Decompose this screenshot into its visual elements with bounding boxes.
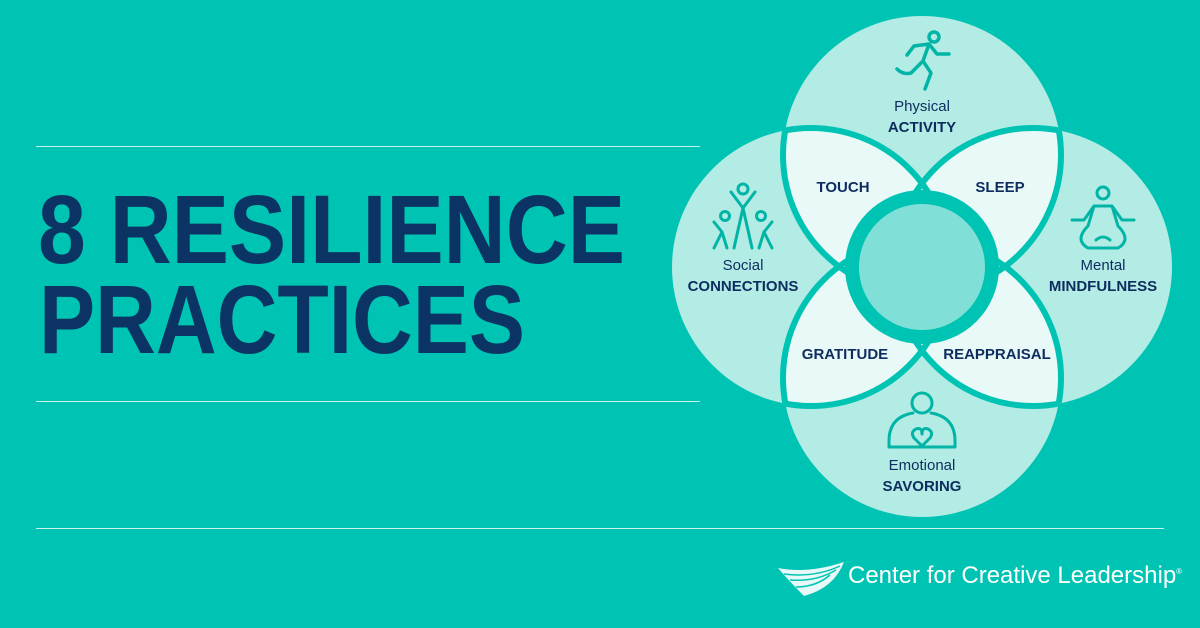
labels: Mental [1080,257,1126,274]
diagram: eight practices [672,16,1172,517]
labels: Social [723,257,763,274]
labels: CONNECTIONS [688,278,798,295]
icon: runner [897,32,949,89]
labels: SAVORING [883,478,961,495]
title [38,180,625,370]
labels: ACTIVITY [888,119,956,136]
icon: meditation [1072,187,1134,248]
logo [778,562,1182,596]
labels: Emotional [889,457,955,474]
labels: GRATITUDE [802,346,888,363]
labels: MINDFULNESS [1049,278,1157,295]
labels: Physical [894,98,950,115]
labels: REAPPRAISAL [943,346,1051,363]
labels [688,98,1157,495]
labels: SLEEP [975,179,1025,196]
icon: social [714,184,772,248]
icon: emotional [889,393,955,447]
center circle [852,197,992,337]
labels: TOUCH [816,179,870,196]
logo: Center for Creative Leadership® [848,562,1182,589]
